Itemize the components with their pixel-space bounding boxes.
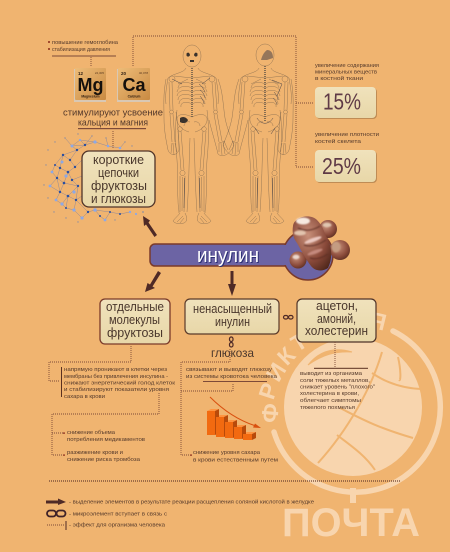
- text: binds glucose: из системы кровотока человека: [186, 374, 278, 380]
- arrow: inulin to short chains: [143, 216, 157, 237]
- stat: 25%: [315, 150, 377, 183]
- stat: 15%: [315, 87, 377, 119]
- box: short chains of fructose and glucose: фруктозы: [91, 179, 147, 193]
- tile: magnesium: 12: [78, 71, 84, 76]
- text: removes heavy metals: [300, 368, 375, 411]
- tile: magnesium: Magnesium: [81, 94, 100, 98]
- text: minerals increase: [315, 63, 379, 82]
- text: minerals increase: увеличение содержания: [315, 63, 379, 69]
- box: acetone, ammonium, cholesterol: ацетон,: [316, 299, 358, 313]
- connector: glucose to description and result: [181, 349, 233, 455]
- box: unsaturated inulin: [185, 299, 279, 334]
- box: short chains of fructose and glucose: короткие: [93, 153, 144, 167]
- box: unsaturated inulin: инулин: [215, 315, 250, 329]
- tile: magnesium: [74, 68, 106, 102]
- tile: calcium: 20: [121, 71, 127, 76]
- text: density increase: увеличение плотности: [315, 132, 379, 138]
- box: short chains of fructose and glucose: и глюкозы: [91, 192, 146, 206]
- heading: stimulate absorption: стимулируют усвоение: [63, 108, 163, 118]
- watermark: globe and post logo: Ф: [256, 402, 284, 424]
- box: short chains of fructose and glucose: [82, 151, 155, 207]
- list: hemoglobin and pressure: повышение гемоглобина: [52, 40, 119, 46]
- text: lower sugar naturally: [190, 450, 278, 464]
- watermark: globe and post logo: Т: [286, 327, 312, 357]
- watermark: globe and post logo: И: [261, 358, 291, 386]
- text: density increase: костей скелета: [315, 138, 362, 145]
- list: hemoglobin and pressure: стабилизация давления: [52, 47, 110, 53]
- stat: 15%: 15%: [323, 88, 361, 114]
- watermark: globe and post logo: К: [272, 341, 301, 370]
- tile: calcium: [117, 68, 150, 102]
- text: fructose effect: сахара в крови: [64, 394, 105, 400]
- text: removes heavy metals: соли тяжелых металлов,: [300, 378, 370, 384]
- text: fructose effect: мембраны без привлечения инсулина -: [64, 374, 168, 380]
- legend: - эффект для организма человека: [69, 522, 166, 528]
- text: density increase: [315, 132, 379, 145]
- text: blood thinning: разжижение крови и: [67, 450, 123, 456]
- watermark: globe and post logo: Я: [367, 306, 389, 336]
- text: minerals increase: минеральных веществ: [315, 70, 377, 76]
- text: reduced medication: снижение объема: [67, 430, 116, 436]
- box: unsaturated inulin: ненасыщенный: [193, 302, 272, 316]
- connector: fructose to description: [49, 346, 131, 381]
- text: removes heavy metals: снижает уровень "плохого": [300, 384, 375, 390]
- connector: description to results: [52, 393, 159, 455]
- text: fructose effect: снижают энергетический голод клеток: [64, 380, 175, 386]
- tile: magnesium: 24,305: [95, 71, 104, 75]
- box: single fructose molecules: [100, 299, 170, 344]
- text: blood thinning: снижение риска тромбоза: [67, 457, 141, 463]
- banner: inulin: инулин: [197, 245, 259, 267]
- legend: - выделение элементов в результате реакции расщепления соляной кислотой в желудке: [69, 498, 314, 506]
- icon: chain link horizontal: [284, 316, 293, 319]
- icon: chain link vertical: [230, 337, 233, 347]
- text: lower sugar naturally: в крови естественным путем: [193, 458, 278, 464]
- connector: calcium to skeleton and percentages: [133, 36, 313, 167]
- text: removes heavy metals: выводит из организма: [300, 371, 363, 377]
- icon: jerusalem artichoke tuber: [290, 216, 350, 270]
- skeleton: front view: [164, 45, 234, 224]
- text: fructose effect: [61, 367, 175, 400]
- text: fructose effect: напрямую проникают в клетки через: [64, 367, 167, 373]
- watermark: globe and post logo: [253, 306, 440, 545]
- tile: calcium: Calcium: [128, 94, 140, 98]
- arrow: inulin to fructose molecules: [145, 271, 161, 292]
- text: minerals increase: в костной ткани: [315, 75, 363, 82]
- text: binds glucose: связывают и выводят глюкозу: [186, 367, 272, 373]
- box: acetone, ammonium, cholesterol: амоний,: [317, 312, 356, 326]
- watermark: globe and post logo: Р: [253, 380, 283, 402]
- box: short chains of fructose and glucose: цепочки: [98, 166, 139, 180]
- text: lower sugar naturally: снижение уровня сахара: [193, 450, 261, 456]
- stat: 25%: 25%: [322, 153, 361, 179]
- connector: list to magnesium: [90, 57, 92, 67]
- tile: magnesium: Mg: [78, 75, 104, 95]
- tile: calcium: Ca: [122, 75, 146, 95]
- text: removes heavy metals: тяжелого похмелья: [300, 405, 355, 411]
- heading: stimulate absorption: кальция и магния: [78, 118, 148, 128]
- skeleton: back view: [223, 44, 293, 224]
- legend: [46, 498, 314, 530]
- text: removes heavy metals: облегчает симптомы: [300, 398, 361, 404]
- heading: stimulate absorption: [63, 108, 163, 129]
- watermark: globe and post logo: ПОЧТА: [282, 501, 420, 545]
- molecule network: [43, 133, 144, 223]
- box: single fructose molecules: молекулы: [109, 313, 160, 327]
- banner: inulin: [150, 230, 333, 280]
- tile: calcium: 40,078: [139, 71, 148, 75]
- text: blood thinning: [63, 450, 141, 463]
- box: acetone, ammonium, cholesterol: холестерин: [305, 324, 368, 338]
- box: acetone, ammonium, cholesterol: [297, 299, 376, 342]
- connector: cholesterol box to description: [334, 342, 336, 368]
- legend: - микроэлемент вступает в связь с: [69, 512, 167, 518]
- text: reduced medication: потребления медикаментов: [67, 437, 145, 443]
- chart: falling orange bars: [207, 397, 261, 440]
- box: single fructose molecules: отдельные: [106, 300, 164, 314]
- arrow: inulin to unsaturated inulin: [228, 271, 236, 296]
- connector: absorption to short chains: [112, 131, 114, 148]
- label: glucose: глюкоза: [211, 346, 254, 360]
- box: single fructose molecules: фруктозы: [107, 326, 163, 340]
- text: binds glucose: [186, 367, 278, 382]
- list: hemoglobin and pressure: [48, 40, 119, 56]
- text: reduced medication: [63, 430, 145, 443]
- text: removes heavy metals: холестерина в крови,: [300, 391, 359, 397]
- text: fructose effect: и стабилизируют показатели уровня: [64, 387, 169, 393]
